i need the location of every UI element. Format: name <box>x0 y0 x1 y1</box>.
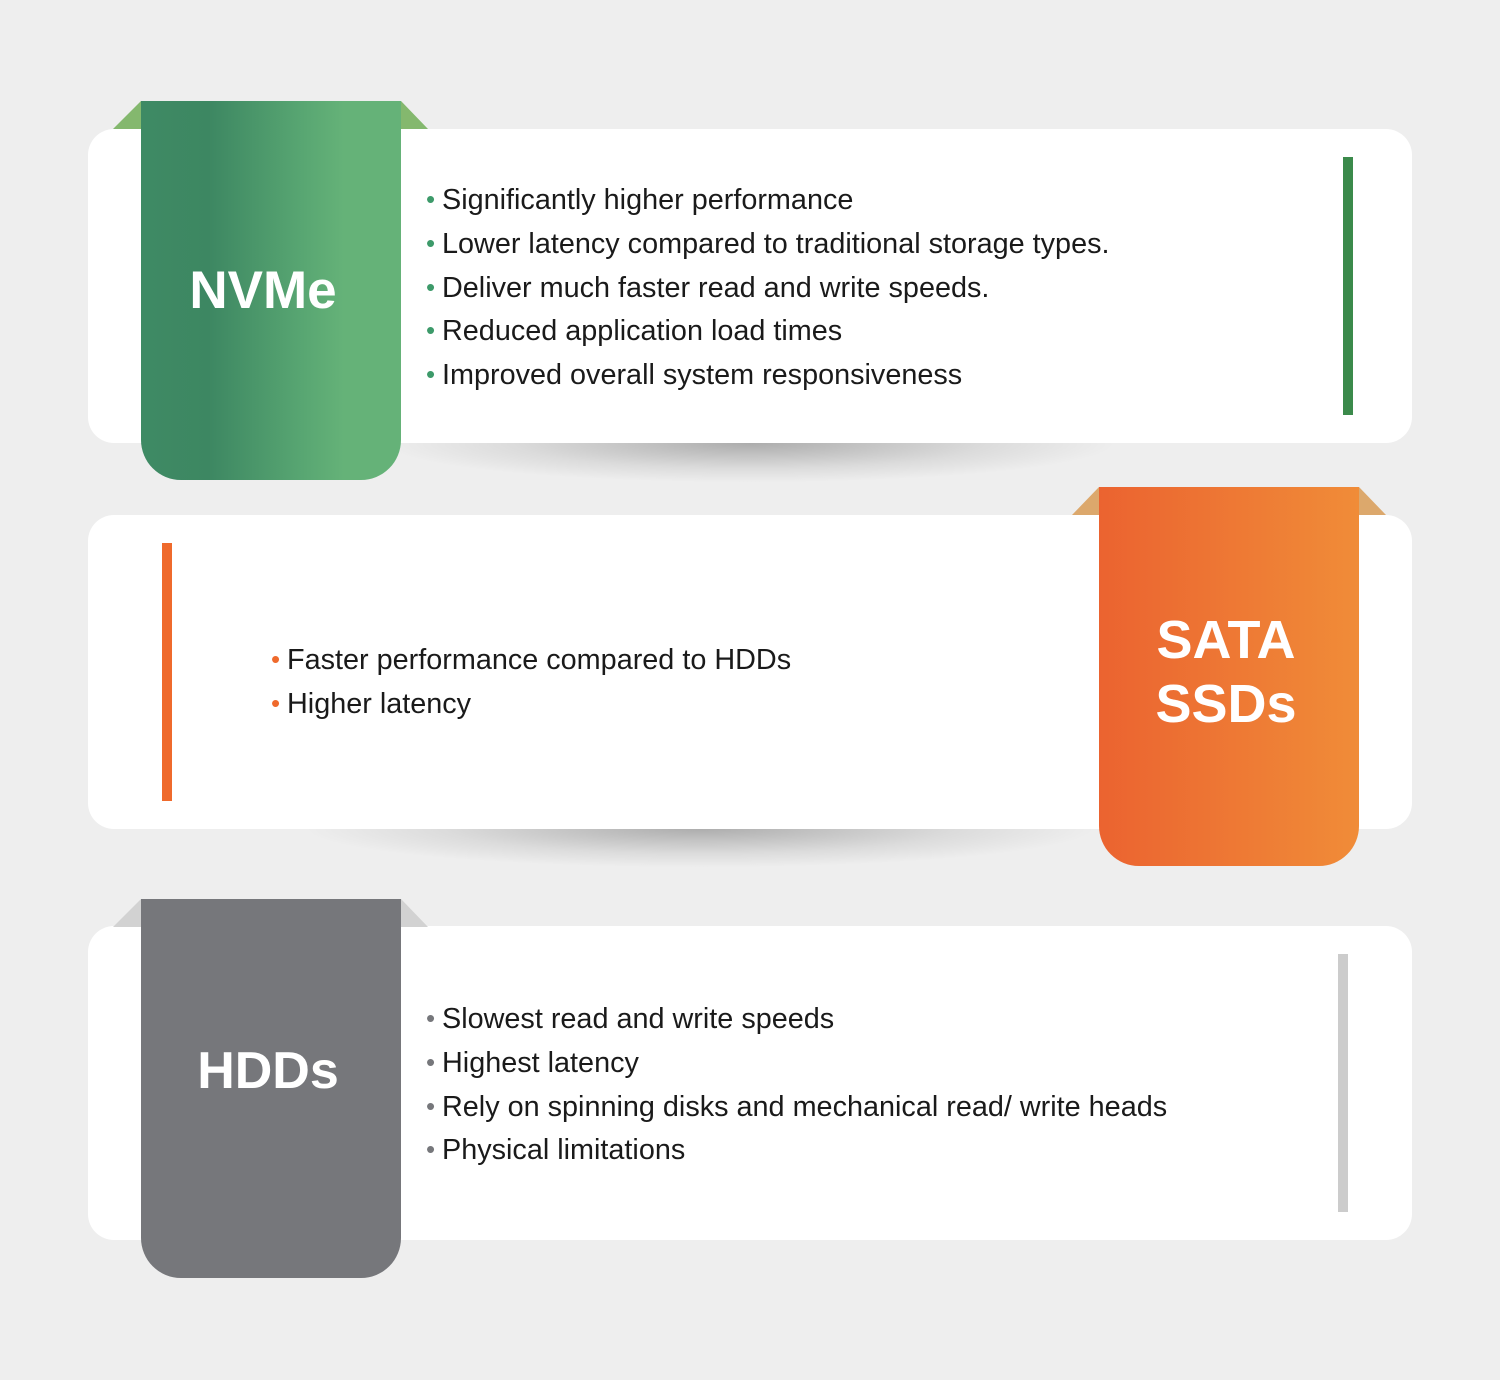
bullet list: NVMe <box>426 184 1110 391</box>
tab: HDDs heading: HDDs <box>197 1042 339 1100</box>
bullet list: NVMe: Improved overall system responsiveness <box>442 359 962 391</box>
card background <box>88 515 1412 829</box>
bullet list: HDDs: • <box>426 1003 435 1033</box>
bullet list: SATA: • <box>271 644 280 674</box>
bullet list: HDDs: Rely on spinning disks and mechanical read/ write heads <box>442 1090 1167 1122</box>
bullet list: NVMe: Deliver much faster read and write speeds. <box>442 272 989 304</box>
accent bar green <box>1343 157 1353 415</box>
fold left <box>113 899 141 927</box>
shadow: nvme card <box>380 443 1120 483</box>
bullet list: HDDs: • <box>426 1134 435 1164</box>
accent bar gray <box>1338 954 1348 1212</box>
tab: NVMe heading: NVMe <box>189 261 337 320</box>
panel: NVMe <box>88 101 1412 480</box>
fold left <box>1072 487 1099 515</box>
bullet list: HDDs: Highest latency <box>442 1047 639 1079</box>
fold right <box>401 899 428 927</box>
bullet list: NVMe: • <box>426 184 435 214</box>
bullet list: NVMe: • <box>426 315 435 345</box>
bullet list: NVMe: • <box>426 359 435 389</box>
card background <box>88 129 1412 443</box>
shadow: sata card <box>300 828 1100 868</box>
panel: HDDs <box>88 899 1412 1278</box>
tab: SATA SSDs heading: SSDs <box>1155 674 1297 734</box>
bullet list: NVMe: • <box>426 272 435 302</box>
accent bar orange <box>162 543 172 801</box>
bullet list: HDDs: Slowest read and write speeds <box>442 1003 834 1035</box>
bullet list: HDDs: • <box>426 1047 435 1077</box>
card background <box>88 926 1412 1240</box>
tab: HDDs heading <box>141 899 401 1278</box>
bullet list: NVMe: Significantly higher performance <box>442 184 853 216</box>
tab: SATA SSDs heading <box>1099 487 1359 866</box>
fold left <box>113 101 141 129</box>
bullet list: NVMe: Reduced application load times <box>442 315 842 347</box>
bullet list: SATA <box>271 644 791 720</box>
bullet list: SATA: Higher latency <box>287 688 471 720</box>
bullet list: NVMe: Lower latency compared to traditional storage types. <box>442 228 1110 260</box>
bullet list: NVMe: • <box>426 228 435 258</box>
tab: NVMe heading <box>141 101 401 480</box>
bullet list: HDDs <box>426 1003 1167 1166</box>
fold right <box>1359 487 1386 515</box>
fold right <box>401 101 428 129</box>
bullet list: HDDs: Physical limitations <box>442 1134 685 1166</box>
bullet list: SATA: Faster performance compared to HDDs <box>287 644 791 676</box>
bullet list: HDDs: • <box>426 1090 435 1120</box>
tab: SATA SSDs heading: SATA <box>1156 610 1295 670</box>
panel: SATA SSDs <box>88 487 1412 866</box>
bullet list: SATA: • <box>271 688 280 718</box>
